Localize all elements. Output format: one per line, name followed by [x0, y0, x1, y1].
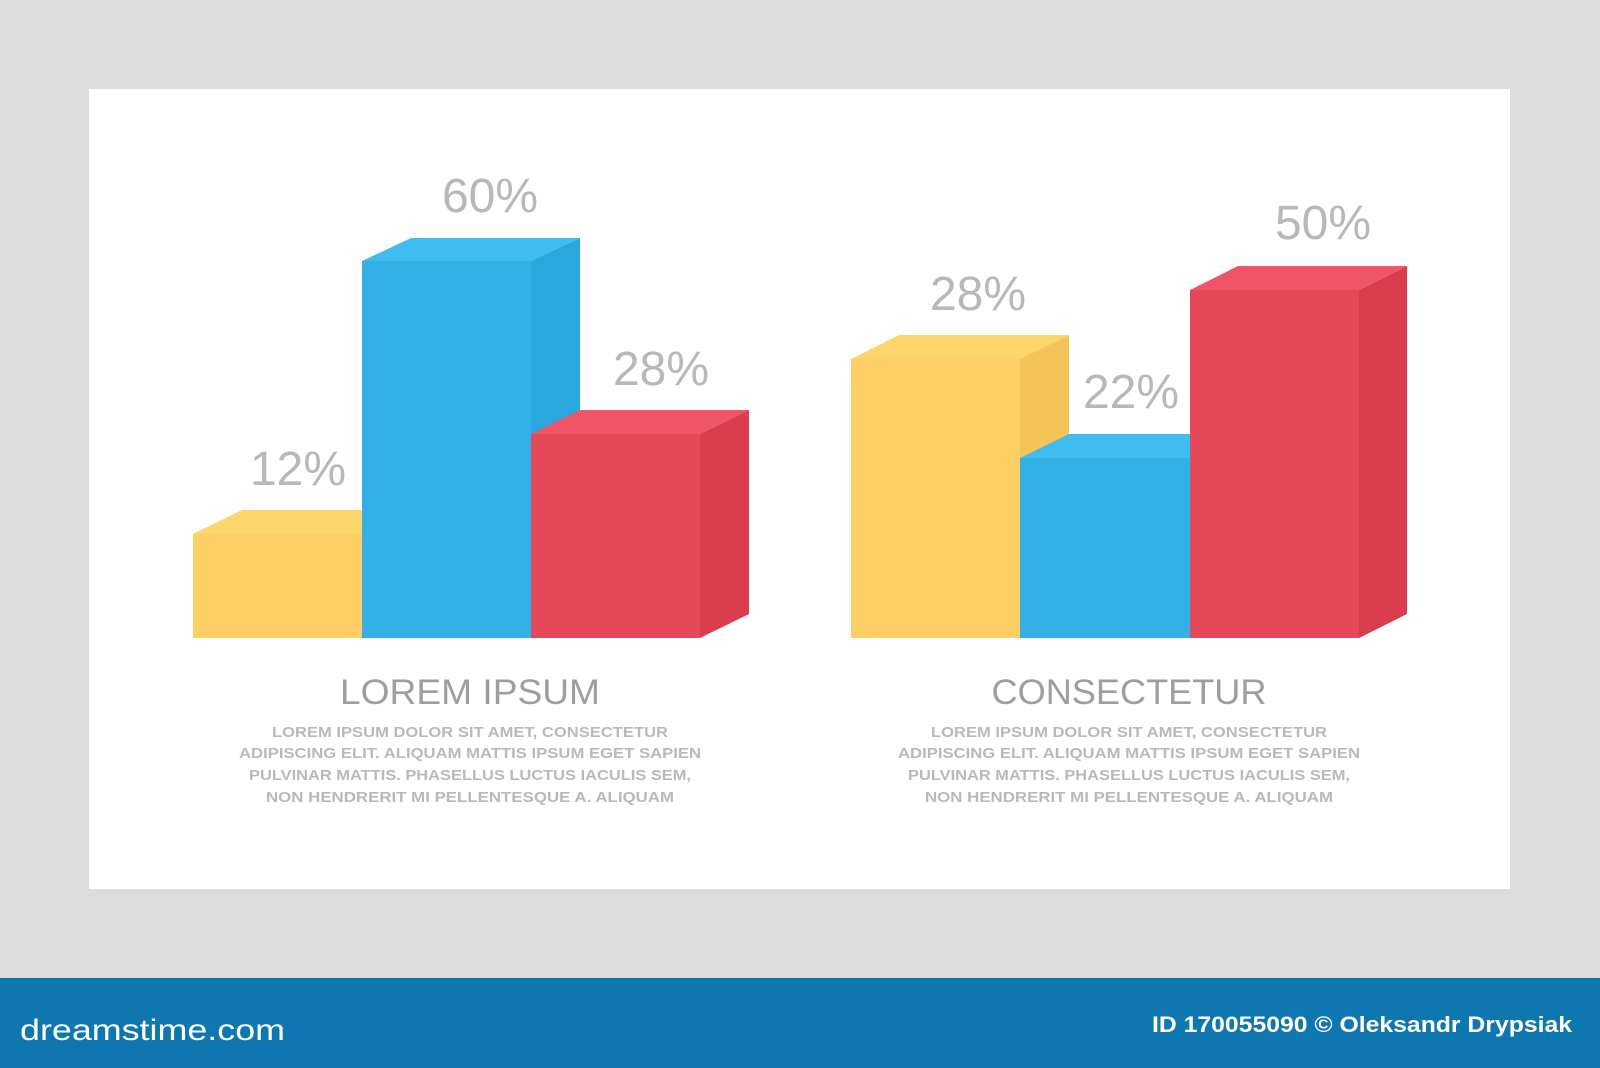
text block: left description: LOREM IPSUM DOLOR SIT AMET, CONSECTETUR: [272, 724, 668, 741]
text block: left description: ADIPISCING ELIT. ALIQUAM MATTIS IPSUM EGET SAPIEN: [239, 745, 701, 762]
label: 28%: 28%: [930, 268, 1026, 321]
label: 22%: 22%: [1083, 366, 1179, 419]
text block: right description: PULVINAR MATTIS. PHASELLUS LUCTUS IACULIS SEM,: [908, 767, 1350, 784]
label: 12%: 12%: [250, 443, 346, 496]
text block: right description: [898, 724, 1360, 806]
text block: right description: LOREM IPSUM DOLOR SIT AMET, CONSECTETUR: [931, 724, 1327, 741]
bar: red 50%: [1190, 266, 1407, 638]
text block: left description: NON HENDRERIT MI PELLENTESQUE A. ALIQUAM: [266, 789, 674, 806]
heading: CONSECTETUR: CONSECTETUR: [992, 673, 1266, 712]
text block: right description: ADIPISCING ELIT. ALIQUAM MATTIS IPSUM EGET SAPIEN: [898, 745, 1360, 762]
text block: left description: PULVINAR MATTIS. PHASELLUS LUCTUS IACULIS SEM,: [249, 767, 691, 784]
chart: right bar chart: [851, 197, 1407, 638]
label: 60%: 60%: [442, 170, 538, 223]
bar: blue 22%: [1020, 434, 1238, 638]
bar: blue 60%: [362, 238, 580, 638]
bar: red 28%: [531, 410, 749, 638]
bar: yellow 28%: [851, 335, 1069, 638]
logo text: dreamstime.com: [20, 1014, 285, 1047]
label: 50%: 50%: [1275, 197, 1371, 250]
chart: left bar chart: [193, 170, 749, 638]
label: 28%: 28%: [613, 343, 709, 396]
text block: left description: [239, 724, 701, 806]
text block: right description: NON HENDRERIT MI PELLENTESQUE A. ALIQUAM: [925, 789, 1333, 806]
heading: LOREM IPSUM: LOREM IPSUM: [340, 673, 600, 712]
footer banner: [0, 978, 1600, 1068]
white panel: [89, 89, 1510, 889]
bar: yellow 12%: [193, 510, 411, 638]
credit text: ID 170055090 © Oleksandr Drypsiak: [1152, 1012, 1573, 1037]
